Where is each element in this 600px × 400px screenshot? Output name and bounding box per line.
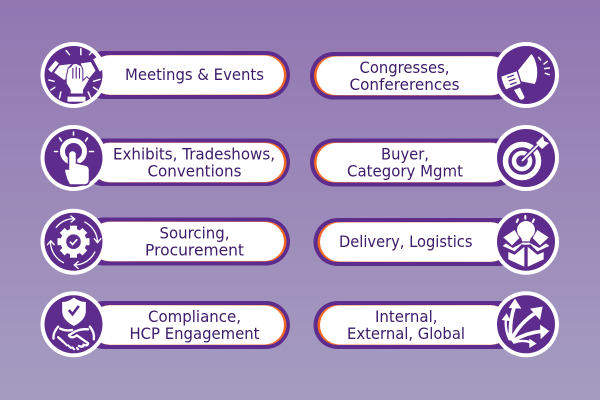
label: Delivery, Logistics [339,232,472,251]
label line 2: Procurement [145,240,244,260]
label: Exhibits, Tradeshows, [113,144,275,164]
panel: Meetings & Events [40,42,290,108]
label: Buyer, [381,144,429,164]
icon: megaphone [493,42,559,108]
panel: Exhibits, Tradeshows, Conventions [40,125,290,191]
panel: Internal, External, Global [314,291,559,357]
label line 2: HCP Engagement [130,324,260,343]
icon: hands [40,42,106,108]
icon: pointer button [40,125,106,191]
icon: target and dart [493,125,559,191]
label line 2: Confererences [350,75,460,94]
panel: Sourcing, Procurement [40,209,290,275]
label line 2: External, Global [347,324,465,343]
panel: Compliance, HCP Engagement [40,291,290,357]
icon: open box with light bulb [493,209,559,275]
panel: Buyer, Category Mgmt [310,125,559,191]
label: Compliance, [148,307,241,326]
panel: Congresses, Conferences [310,42,559,108]
icon: diverging arrows [493,291,559,357]
label line 2: Category Mgmt [347,162,463,180]
label: Internal, [375,307,438,326]
label line 2: Conventions [148,162,242,180]
panel: Delivery, Logistics [314,209,559,275]
label: Sourcing, [160,224,230,242]
icon: gear with cycle arrows [40,209,106,275]
label: Congresses, [360,58,450,77]
icon: shield and handshake [40,291,106,357]
label: Meetings & Events [125,65,264,84]
